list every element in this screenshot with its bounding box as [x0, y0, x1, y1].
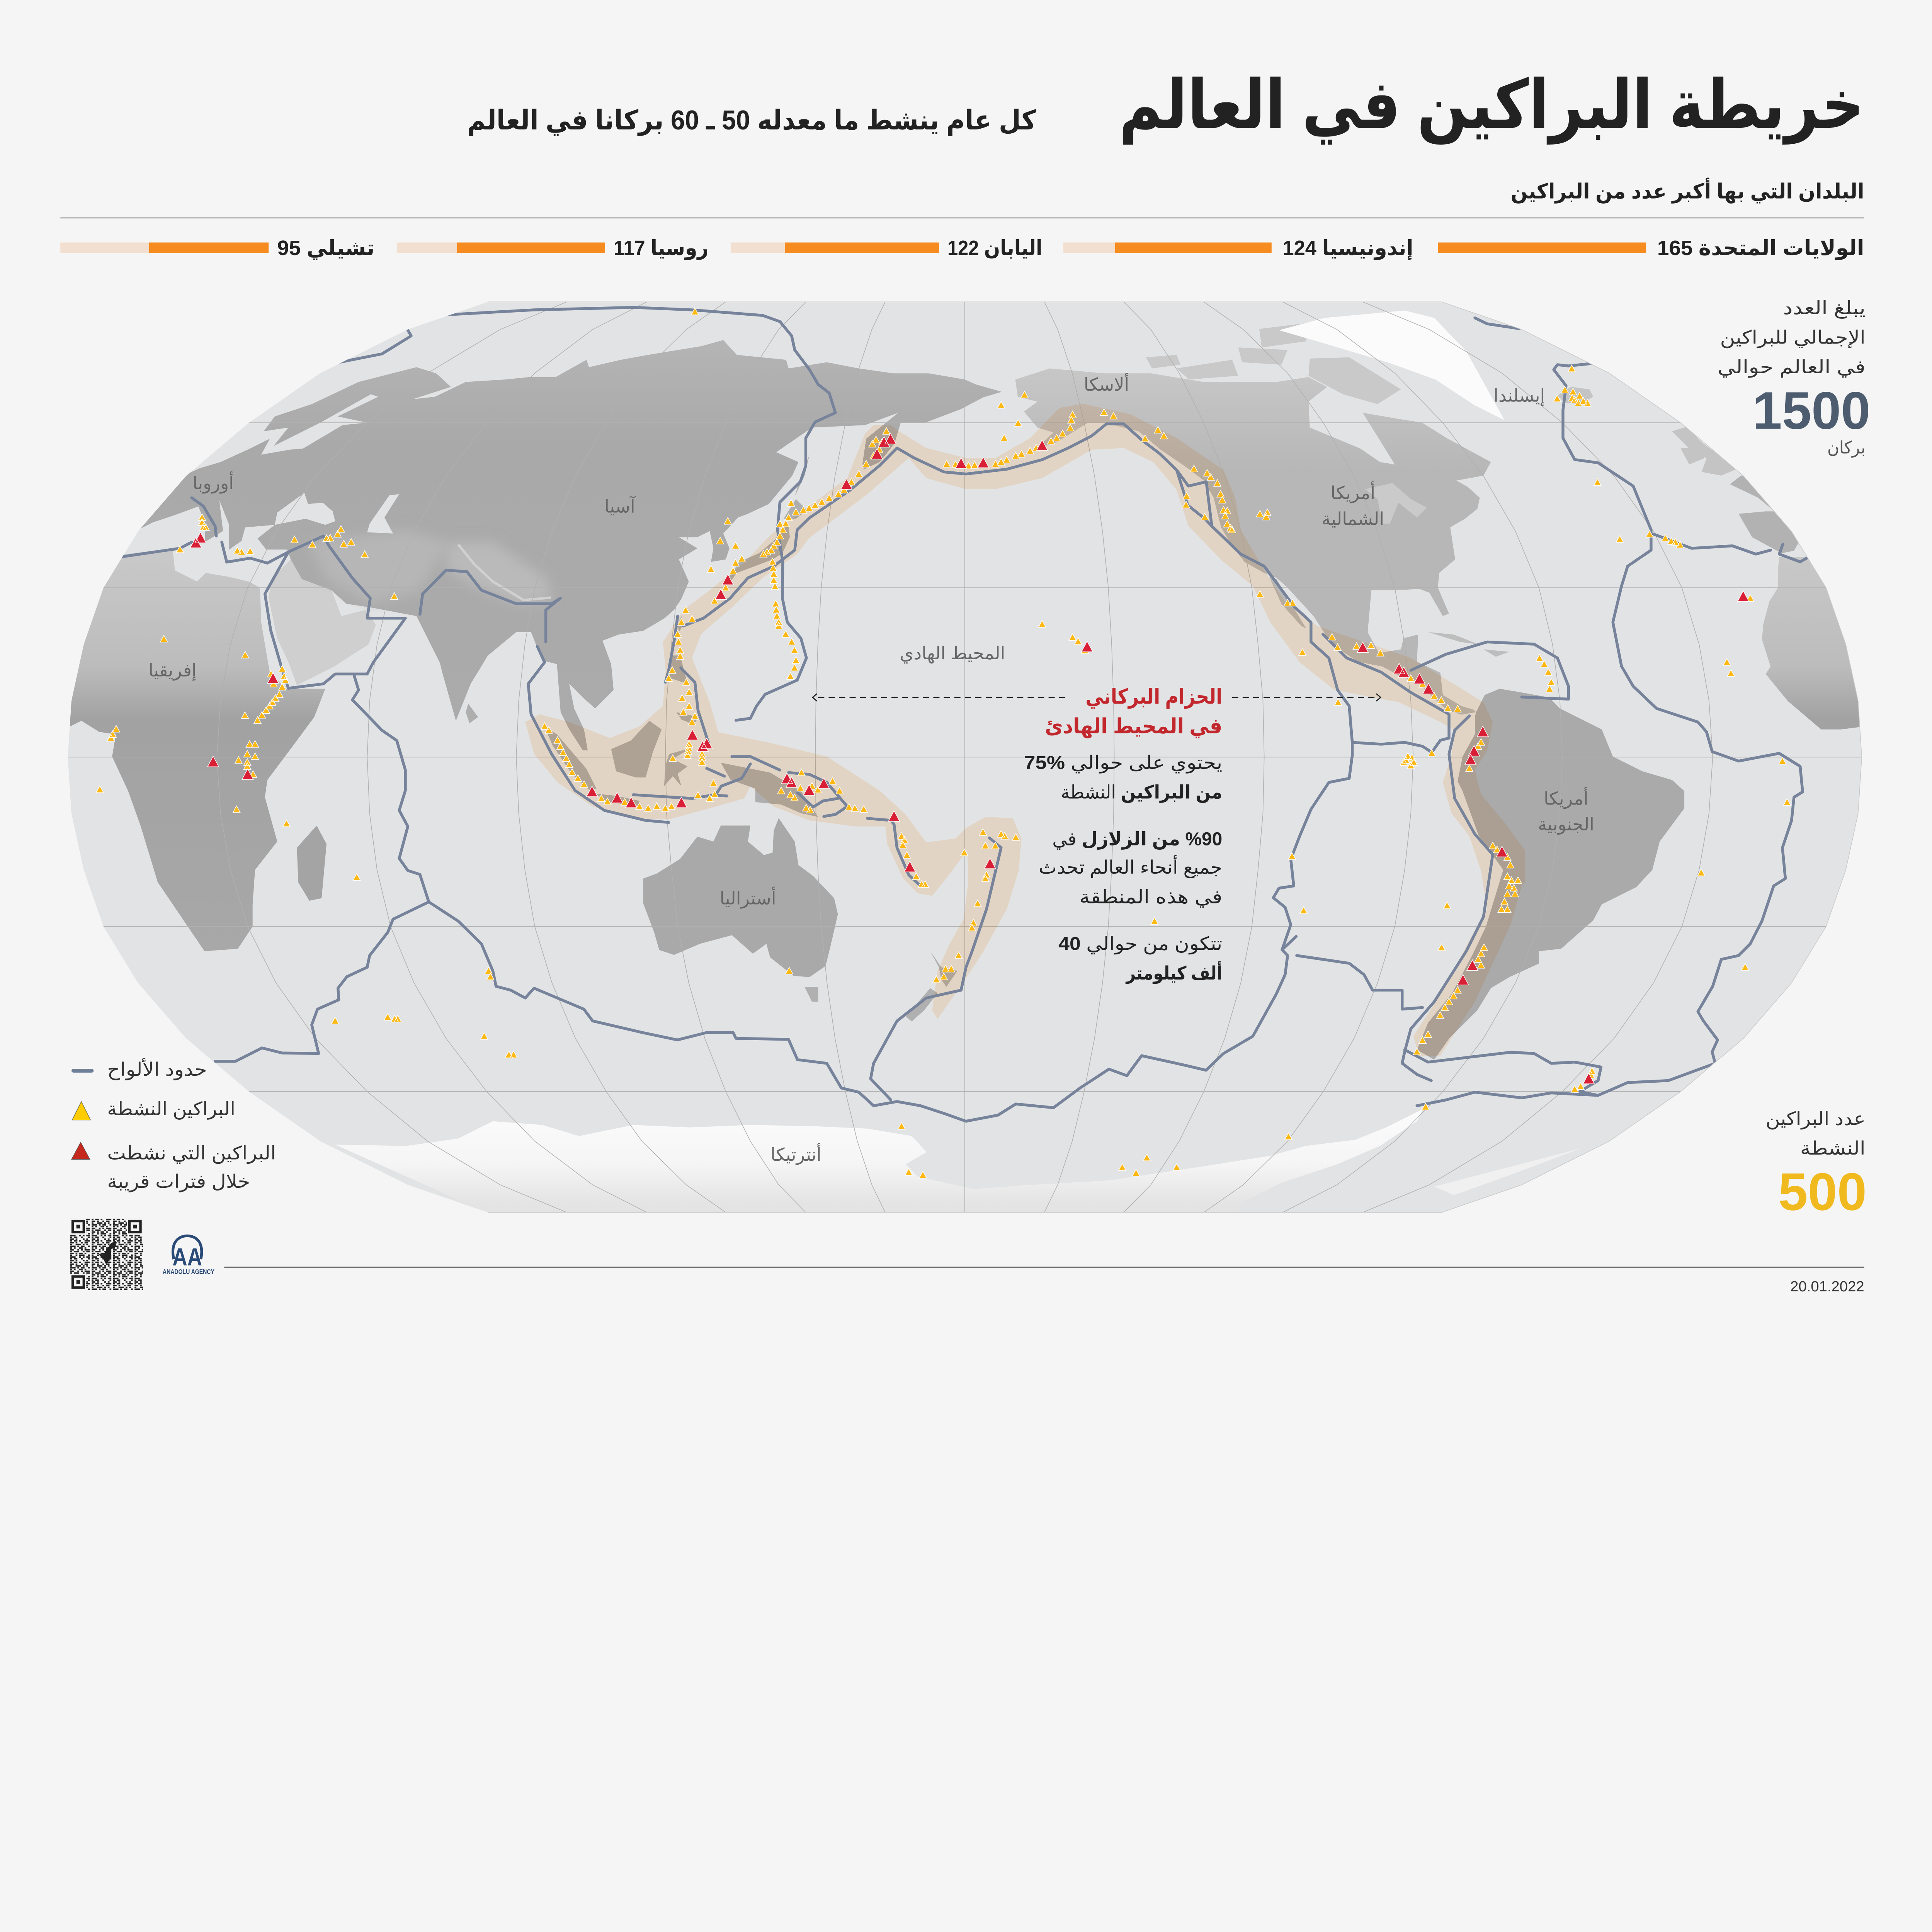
bar: Indonesia 124 [1063, 236, 1413, 260]
bar: Russia 117: روسيا 117 [614, 236, 709, 260]
legend: active volcanoes: البراكين النشطة [107, 1099, 235, 1120]
bar: Russia 117 [397, 236, 709, 260]
bar: Japan 122: اليابان 122 [947, 236, 1043, 260]
callout facts [1024, 753, 1222, 984]
continent labels [148, 372, 1594, 1165]
total volcanoes stat: الإجمالي للبراكين [1720, 328, 1866, 349]
label: Africa: إفريقيا [148, 660, 197, 681]
total volcanoes stat [1718, 298, 1871, 457]
graticule [68, 302, 1862, 1213]
active volcanoes stat: النشطة [1800, 1138, 1866, 1159]
Japan [730, 455, 810, 582]
bar: Japan 122 [731, 236, 1043, 260]
callout facts: من البراكين النشطة [1061, 782, 1222, 803]
label: South America: الجنوبية [1538, 814, 1594, 835]
label: Alaska: ألاسكا [1084, 372, 1129, 395]
callout facts: ألف كيلومتر [1126, 961, 1222, 984]
label: North America [1321, 481, 1384, 529]
bar: United States 165 [1438, 236, 1864, 260]
subtitle: كل عام ينشط ما معدله 50 ـ 60 بركانا في العالم [467, 105, 1036, 136]
active volcanoes [96, 308, 1791, 1178]
Caribbean islands [1428, 632, 1509, 657]
Africa west [1762, 557, 1861, 730]
label: Asia: آسيا [604, 496, 636, 517]
callout facts: تتكون من حوالي 40 [1058, 934, 1222, 955]
label: South America: أمريكا [1544, 786, 1588, 809]
Eurasia [137, 340, 1002, 750]
active volcanoes stat: عدد البراكين [1766, 1109, 1866, 1129]
North America [1015, 368, 1491, 714]
Pacific Ring of Fire belt [525, 404, 1525, 1056]
label: Europe: أوروبا [192, 471, 234, 494]
callout facts: في هذه المنطقة [1079, 887, 1222, 908]
Australia [643, 818, 838, 977]
date: 20.01.2022 [1790, 1278, 1864, 1295]
callout facts: %90 من الزلازل في [1052, 829, 1222, 850]
bar: Chile 95 [60, 236, 374, 260]
total volcanoes stat: بركان [1827, 438, 1866, 457]
callout facts: جميع أنحاء العالم تحدث [1039, 855, 1222, 878]
recently active volcanoes [190, 434, 1749, 1084]
map outline [488, 302, 1862, 1213]
Tasmania and New Zealand [804, 951, 957, 1021]
callout arrow left [813, 694, 1066, 701]
legend [71, 1058, 276, 1192]
Africa east [69, 548, 325, 951]
callout heading: في المحيط الهادئ [1045, 714, 1222, 738]
callout heading: الحزام البركاني [1085, 685, 1222, 709]
legend: recently active volcanoes [71, 1142, 276, 1192]
world map [60, 67, 1873, 1295]
Canadian Arctic [1146, 323, 1401, 404]
ranking heading: البلدان التي بها أكبر عدد من البراكين [1510, 177, 1864, 203]
callout heading [1045, 685, 1222, 738]
Anadolu Agency logo: ANADOLU AGENCY [163, 1268, 214, 1276]
Anadolu Agency logo: AA [172, 1243, 202, 1271]
Madagascar [297, 825, 327, 901]
country bars [60, 236, 1864, 260]
callout facts: يحتوي على حوالي %75 [1024, 753, 1222, 774]
Greenland [1279, 311, 1504, 420]
Britain and Iceland [1558, 387, 1738, 476]
bar: United States 165: الولايات المتحدة 165 [1657, 236, 1864, 260]
label: North America: أمريكا [1330, 481, 1375, 503]
total volcanoes stat: 1500 [1753, 381, 1871, 440]
label: South America [1538, 786, 1594, 835]
bar: Indonesia 124: إندونيسيا 124 [1283, 236, 1413, 260]
total volcanoes stat: في العالم حوالي [1718, 357, 1866, 378]
Iberia and France [1730, 476, 1799, 553]
label: Australia: أستراليا [720, 886, 776, 909]
Southeast Asia islands [466, 616, 818, 817]
continents [69, 311, 1861, 1213]
ocean [61, 296, 1873, 1220]
label: North America: الشمالية [1321, 509, 1384, 529]
label: Iceland: إيسلندا [1493, 386, 1545, 406]
Baja and Great Lakes [1269, 577, 1306, 628]
active volcanoes stat: 500 [1778, 1162, 1867, 1221]
legend: plate boundaries [71, 1058, 207, 1080]
tectonic plate boundaries [118, 308, 1809, 1121]
Black Sea and Caspian [275, 493, 399, 534]
legend: recently active volcanoes: خلال فترات قريبة [107, 1172, 250, 1192]
Anadolu Agency logo [163, 1236, 214, 1276]
Asia relief [308, 530, 551, 604]
South America [1417, 689, 1684, 1060]
Arabia light [269, 560, 376, 685]
QR code [70, 1219, 143, 1290]
callout arrow right [1232, 694, 1381, 701]
Antarctica [335, 1109, 1423, 1213]
legend: recently active volcanoes: البراكين التي نشطت [107, 1143, 276, 1164]
label: Antarctica: أنترتيكا [770, 1143, 821, 1165]
legend: plate boundaries: حدود الألواح [107, 1058, 207, 1080]
callout: Pacific Ring of Fire [813, 685, 1381, 984]
active volcanoes stat [1766, 1109, 1867, 1221]
total volcanoes stat: يبلغ العدد [1783, 298, 1866, 319]
label: Pacific Ocean: المحيط الهادي [900, 643, 1005, 663]
bar: Chile 95: تشيلي 95 [277, 236, 374, 260]
